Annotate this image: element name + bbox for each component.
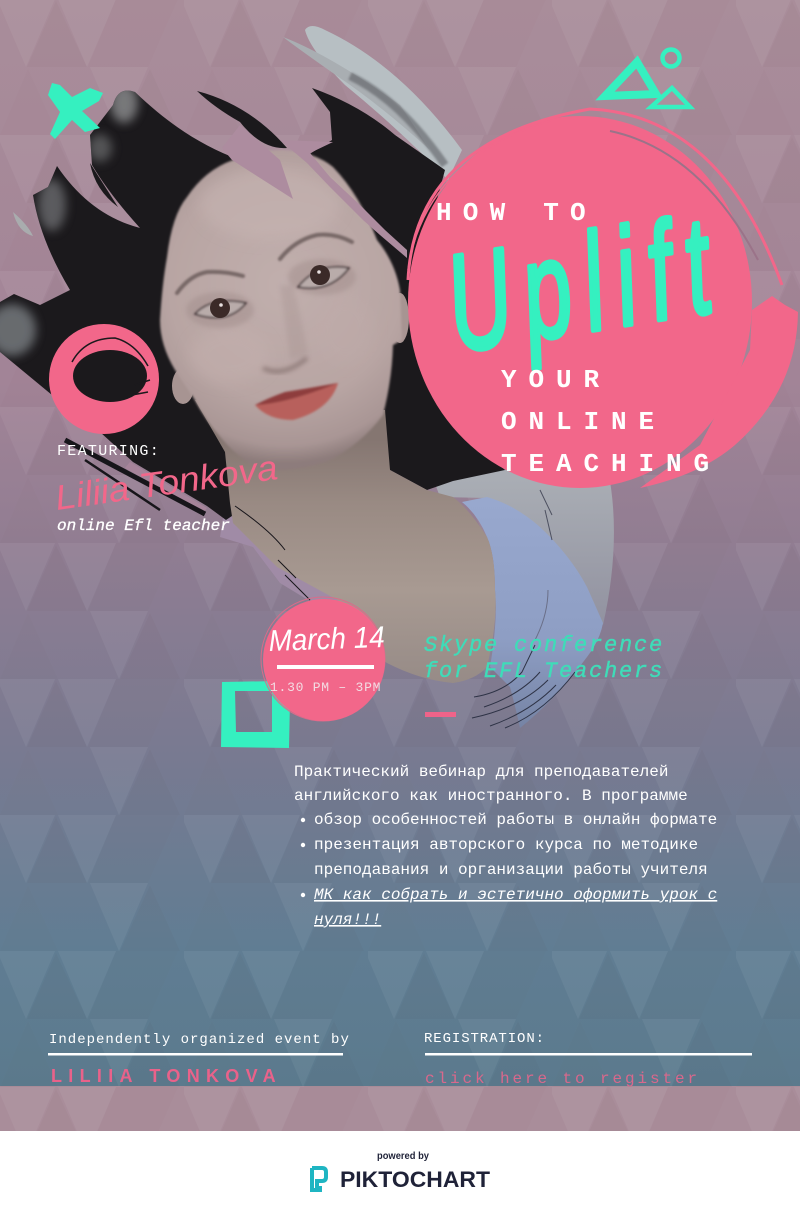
description text: обзор особенностей работы в онлайн формате [314,811,717,829]
description text: преподавания и организации работы учителя [314,861,708,879]
facial shading and features [177,170,375,420]
organizer label: Independently organized event by [49,1032,350,1048]
face [160,150,409,470]
organizer block [48,1032,350,1086]
blue dress [462,497,603,728]
mouth [255,383,338,420]
dark hair streak [197,91,287,148]
title: your online teaching: TEACHING [501,449,721,479]
right eye [288,259,356,295]
teal triangles and ring icon [605,50,690,107]
description text: презентация авторского курса по методике [314,836,698,854]
hair: right side [300,88,505,490]
registration link: click here to register [425,1070,700,1088]
footer: piktochart logo icon [312,1168,326,1190]
event type heading: Skype conference [424,633,664,658]
black brush tail under hair [65,440,310,600]
nose [263,358,307,371]
photo: portrait of the speaker [0,26,614,728]
dress brush lines [472,490,575,728]
date: March 14 [268,621,385,658]
organizer name: LILIIA TONKOVA [51,1066,282,1086]
title: your online teaching [501,365,721,479]
date circle [261,597,385,721]
title: how to: HOW TO [436,198,597,228]
title: your online teaching: YOUR [501,365,611,395]
registration block [424,1031,752,1088]
description text [294,763,717,929]
speaker block [53,443,280,535]
footer: piktochart wordmark: PIKTOCHART [340,1167,491,1192]
bottom pink band [0,1086,800,1131]
teal square brush icon [221,681,290,748]
registration label: REGISTRATION: [424,1031,545,1047]
speaker name: Liliia Tonkova [53,448,280,518]
date underline [277,665,374,669]
teal X icon [48,83,103,139]
main pink circle [408,109,798,488]
description text: МК как собрать и эстетично оформить урок с [314,886,717,904]
time: 1.30 PM – 3PM [270,680,381,695]
pink dash [425,712,456,717]
description text: Практический вебинар для преподавателей [294,763,668,781]
title: uplift: Uplift [437,186,734,382]
event type heading [424,633,664,684]
footer: powered by: powered by [377,1150,429,1162]
description text: нуля!!! [314,911,381,929]
description text: английского как иностранного. В программе [294,787,688,805]
event type heading: for EFL Teachers [424,659,664,684]
eyebrows [177,272,243,293]
hair: left side [0,83,300,520]
pink enso ring icon [49,324,159,434]
footer: white panel [0,1131,800,1211]
title: your online teaching: ONLINE [501,407,666,437]
left eye [186,292,254,328]
grey brush stroke at the top [283,26,462,180]
background-coloured brush cuts [125,125,407,513]
neck and chest [195,400,496,683]
speaker role: online Efl teacher [57,517,230,535]
photo backdrop behind shoulder [430,470,614,625]
lilac wedge under the shoulder [220,505,345,605]
featuring label: FEATURING: [57,443,160,460]
